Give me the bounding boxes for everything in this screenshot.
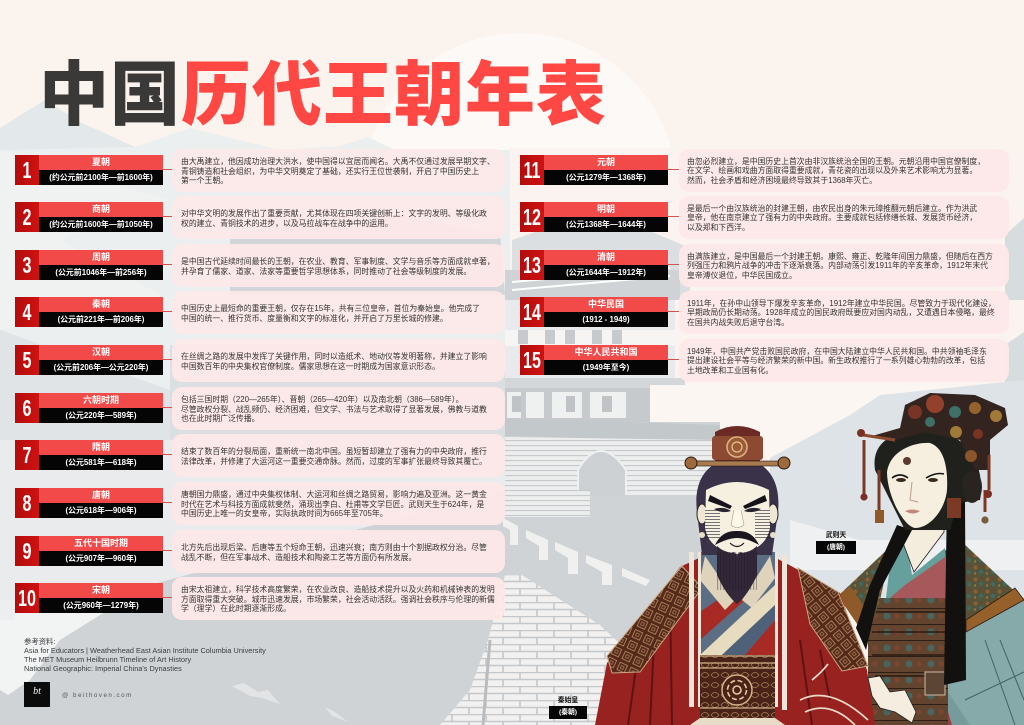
panel: Republic of China [520, 291, 1009, 334]
panel: dynasty 2 Shang: 对中华文明的发展作出了重要贡献，尤其体现在四项关键创新上：文字的发明、等级化政 [181, 209, 487, 218]
references text block [24, 637, 266, 673]
pagoda building behind cards [170, 210, 505, 440]
chest with crossed collar [700, 552, 775, 657]
panel: dynasty 4 Qin: 中国历史上最短命的重要王朝，仅存在15年，共有三位皇帝，首位为秦始皇。他完成了 [181, 304, 480, 313]
panel: dynasty 6 Six Dynasties [15, 387, 505, 430]
shoulder brocades [607, 566, 702, 673]
panel: dynasty 1 Xia [15, 149, 505, 192]
figure: clasped hands [868, 676, 916, 723]
caption: Qin Shi Huang: 秦始皇 [558, 697, 578, 704]
panel: dynasty 6 Six Dynasties: 六朝时期 [83, 395, 119, 405]
panel: dynasty 11 Yuan: (公元1279年—1368年) [566, 173, 646, 182]
panel: dynasty 5 Han [15, 339, 505, 382]
moustache and beard [715, 531, 759, 545]
panel: dynasty 1 Xia: 第一个王朝。 [181, 176, 228, 185]
panel: dynasty 12 Ming: 明朝 [597, 204, 615, 214]
panel: dynasty 11 Yuan [520, 149, 1009, 192]
website link: @ beithoven.com [62, 692, 133, 699]
panel: People's Republic of China [520, 339, 1009, 382]
caption: Wu Zetian: (唐朝) [827, 544, 845, 551]
panel: dynasty 9 Five Dynasties: 战乱不断，但在军事战术、造船技术和陶瓷工艺等方面仍有所发展。 [181, 552, 416, 562]
panel: dynasty 5 Han: 5 [23, 347, 31, 373]
figure: Wu Zetian [838, 393, 1024, 725]
panel: dynasty 8 Tang: (公元618年—906年) [65, 506, 137, 515]
ears [697, 504, 707, 524]
mountains left [0, 100, 512, 600]
panel: dynasty 7 Sui: (公元581年—618年) [65, 458, 137, 467]
long hair strands [856, 525, 912, 650]
vertical white stripes [689, 552, 787, 710]
building above wall [505, 378, 685, 422]
face [887, 443, 947, 528]
caption: Qin Shi Huang: (秦朝) [559, 709, 577, 716]
panel: dynasty 4 Qin: (公元前221年—前206年) [58, 315, 144, 324]
panel: dynasty 7 Sui: 7 [23, 442, 31, 468]
panel: Republic of China: 在国共内战失败后退守台湾。 [687, 318, 789, 327]
sleeve folds [800, 664, 868, 725]
panel: dynasty 8 Tang: 中国历史上唯一的女皇帝，实际执政时间为665年至705年。 [181, 509, 388, 518]
panel: dynasty 3 Zhou: 3 [23, 252, 31, 278]
panel: dynasty 13 Qing: 清朝 [597, 252, 615, 262]
panel: dynasty 6 Six Dynasties: 尽管政权分裂、战乱频仍、经济困难，但文学、书法与艺术取得了显著发展，佛教与道教 [181, 405, 487, 414]
panel: dynasty 11 Yuan: 由忽必烈建立，是中国历史上首次由非汉族统治全国的王朝。元朝沿用中国官僚制度， [687, 157, 985, 166]
panel: Republic of China: 1911年，在孙中山领导下爆发辛亥革命，1912年建立中华民国。尽管致力于现代化建设， [687, 299, 996, 308]
panel: dynasty 11 Yuan: 11 [523, 157, 541, 183]
caption: Qin Shi Huang [549, 696, 587, 719]
belt panel [700, 655, 775, 722]
icon: logo: bt [33, 686, 41, 697]
panel: People's Republic of China: 1949年，中国共产党击败国民政府，在中国大陆建立中华人民共和国。中共领袖毛泽东 [687, 347, 987, 356]
panel: Republic of China: (1912 - 1949) [582, 315, 630, 324]
hair [875, 431, 981, 530]
title: 中国历代王朝年表 [39, 39, 607, 140]
panel: dynasty 12 Ming: 以及郑和下西洋。 [687, 223, 750, 232]
references text block: The MET Museum Heilbrunn Timeline of Art History [24, 655, 191, 664]
panel: Republic of China: 中华民国 [588, 299, 624, 309]
panel: dynasty 4 Qin: 秦朝 [92, 299, 110, 309]
panel: dynasty 12 Ming [520, 196, 1009, 239]
panel: dynasty 13 Qing: 由满族建立，是中国最后一个封建王朝。康熙、雍正、乾隆年间国力鼎盛，但随后在西方 [687, 252, 993, 261]
hair [696, 458, 778, 555]
panel: dynasty 12 Ming: 是最后一个由汉族统治的封建王朝，由农民出身的朱元璋推翻元朝后建立。作为洪武 [687, 204, 977, 213]
panel: dynasty 7 Sui: 隋朝 [92, 442, 110, 452]
sun disc [363, 33, 677, 347]
panel: dynasty 1 Xia: 由大禹建立，他因成功治理大洪水，使中国得以宜居而闻名。大禹不仅通过发展早期文字、 [181, 157, 495, 166]
caption: Wu Zetian [816, 531, 856, 554]
panel: dynasty 13 Qing: 13 [523, 252, 541, 278]
tassels [863, 435, 895, 440]
panel: dynasty 9 Five Dynasties: 五代十国时期 [74, 538, 128, 548]
panel: dynasty 8 Tang: 8 [23, 490, 31, 516]
face [705, 482, 770, 554]
right upper backdrop [505, 148, 1024, 400]
panel: dynasty 6 Six Dynasties: (公元220年—589年) [65, 411, 137, 420]
panel: dynasty 8 Tang [15, 482, 505, 525]
panel: People's Republic of China: 中华人民共和国 [574, 347, 638, 357]
panel: dynasty 5 Han: (公元前206年—公元220年) [54, 363, 148, 372]
panel: dynasty 1 Xia: 1 [23, 157, 31, 183]
icon: logo [24, 682, 50, 707]
panel: dynasty 3 Zhou: 周朝 [92, 252, 110, 262]
panel: dynasty 7 Sui: 结束了数百年的分裂局面，重新统一南北中国。虽短暂却建立了强有力的中央政府，推行 [181, 447, 487, 456]
panel: dynasty 7 Sui: 法律改革，并修建了大运河这一重要交通命脉。然而，过度的军事扩张最终导致其覆亡。 [181, 456, 487, 466]
great wall [0, 418, 720, 725]
crown [872, 393, 1008, 470]
panel: dynasty 6 Six Dynasties: 包括三国时期（220—265年）、晋朝（265—420年）以及南北朝（386—589年）。 [181, 395, 463, 404]
panel: dynasty 1 Xia: (约公元前2100年—前1600年) [49, 173, 153, 182]
panel: dynasty 2 Shang: 商朝 [92, 204, 110, 214]
bodice [868, 598, 948, 725]
panel: dynasty 3 Zhou [15, 244, 505, 287]
panel: dynasty 7 Sui [15, 434, 505, 477]
panel: dynasty 4 Qin: 4 [23, 299, 31, 325]
panel: dynasty 10 Song: 宋朝 [92, 585, 110, 595]
panel: dynasty 2 Shang: 2 [23, 204, 31, 230]
panel: dynasty 9 Five Dynasties: (公元907年—960年) [65, 554, 137, 563]
panel: dynasty 9 Five Dynasties [15, 530, 505, 573]
panel: dynasty 10 Song: 方面取得重大突破。城市迅速发展，市场繁荣，社会活动活跃。强调社会秩序与伦理的新儒 [181, 595, 495, 604]
panel: dynasty 1 Xia: 夏朝 [92, 157, 110, 167]
panel: dynasty 8 Tang: 唐朝 [92, 490, 110, 500]
references text block: National Geographic: Imperial China's Dynasties [24, 664, 182, 673]
panel: dynasty 3 Zhou: 是中国古代延续时间最长的王朝，在农业、教育、军事制度、文学与音乐等方面成就卓著， [181, 257, 495, 266]
panel: dynasty 3 Zhou: (公元前1046年—前256年) [55, 268, 147, 277]
panel: dynasty 10 Song: 学（理学）在此时期逐渐形成。 [181, 604, 291, 613]
panel: dynasty 2 Shang: (约公元前1600年—前1050年) [49, 220, 153, 229]
panel: dynasty 10 Song: 由宋太祖建立，科学技术高度繁荣，在农业改良、造船技术提升以及火药和机械钟表的发明 [181, 585, 495, 594]
panel: dynasty 8 Tang: 唐朝国力鼎盛，通过中央集权体制、大运河和丝绸之路贸易，影响力遍及亚洲。这一黄金 [181, 490, 487, 499]
right backdrop behind figures [650, 380, 1024, 600]
panel: dynasty 2 Shang [15, 196, 505, 239]
panel: People's Republic of China: (1949年至今) [583, 363, 629, 372]
panel: dynasty 11 Yuan: 在文学、绘画和戏曲方面取得重要成就，青花瓷的出现以及外来艺术影响尤为显著。 [687, 166, 977, 175]
panel: Republic of China: 14 [523, 299, 541, 325]
panel: dynasty 5 Han: 在丝绸之路的发展中发挥了关键作用，同时以造纸术、地动仪等发明著称，并建立了影响 [181, 352, 487, 361]
panel: dynasty 5 Han: 中国数百年的中央集权官僚制度。儒家思想在这一时期成为国家意识形态。 [181, 362, 440, 370]
panel: People's Republic of China: 土地改革和工业国有化。 [687, 366, 773, 375]
panel: dynasty 10 Song: 10 [18, 585, 36, 611]
panel: dynasty 9 Five Dynasties: 9 [23, 538, 31, 564]
panel: dynasty 2 Shang: 权的建立、青铜技术的进步，以及马拉战车在战争中的运用。 [181, 218, 393, 228]
panel: dynasty 6 Six Dynasties: 6 [23, 395, 31, 421]
panel: dynasty 8 Tang: 时代在艺术与科技方面成就斐然，涌现出李白、杜甫等文学巨匠。武则天生于624年，是 [181, 500, 484, 509]
collar [886, 532, 948, 598]
panel: dynasty 13 Qing: (公元1644年—1912年) [566, 268, 646, 277]
panel: dynasty 9 Five Dynasties: 北方先后出现后梁、后唐等五个短命王朝，迅速兴衰；南方则由十个割据政权分治。尽管 [181, 543, 487, 552]
hat [715, 426, 760, 462]
panel: dynasty 5 Han: 汉朝 [92, 347, 110, 357]
references text block: 参考资料: [24, 637, 55, 646]
panel: dynasty 13 Qing [520, 244, 1009, 287]
shawl [838, 545, 892, 630]
panel: dynasty 12 Ming: 12 [523, 204, 541, 230]
panel: dynasty 6 Six Dynasties: 也在此时期广泛传播。 [181, 414, 259, 423]
panel: Republic of China: 早期政局仍长期动荡。1928年成立的国民政府既要应对国内动乱，又遭遇日本侵略，最终 [687, 308, 995, 317]
caption: Wu Zetian: 武则天 [826, 532, 846, 539]
panel: dynasty 10 Song: (公元960年—1279年) [63, 601, 139, 610]
back hair and sleeve [905, 598, 1024, 725]
panel: dynasty 12 Ming: 皇帝，他在南京建立了强有力的中央政府。主要成就包括修缮长城、发展货币经济， [687, 213, 977, 222]
panel: dynasty 4 Qin: 中国的统一、推行货币、度量衡和文字的标准化，并开启了万里长城的修建。 [181, 314, 448, 322]
panel: dynasty 11 Yuan: 元朝 [597, 157, 615, 167]
lower left pale streaks [0, 612, 348, 722]
panel: People's Republic of China: 提出建设社会平等与经济繁荣的新中国。新生政权推行了一系列雄心勃勃的改革，包括 [687, 356, 985, 365]
panel: People's Republic of China: 15 [523, 347, 541, 373]
panel: dynasty 4 Qin [15, 291, 505, 334]
panel: dynasty 1 Xia: 青铜铸造和社会组织，为中华文明奠定了基础，还实行王位世袭制，开启了中国历史上 [181, 167, 479, 176]
panel: dynasty 12 Ming: (公元1368年—1644年) [566, 220, 646, 229]
panel: dynasty 13 Qing: 列强压力和鸦片战争的冲击下逐渐衰落。内部动荡引发1911年的辛亥革命，1912年末代 [687, 261, 988, 270]
panel: dynasty 13 Qing: 皇帝溥仪退位，中华民国成立。 [687, 271, 797, 280]
figure: Qin Shi Huang [595, 426, 875, 725]
panel: dynasty 11 Yuan: 然而，社会矛盾和经济困境最终导致其于1368年灭亡。 [687, 176, 877, 185]
panel: dynasty 3 Zhou: 并孕育了儒家、道家、法家等重要哲学思想体系，同时推动了社会等级制度的发展。 [181, 266, 471, 276]
references text block: Asia for Educators | Weatherhead East Asian Institute Columbia University [24, 646, 266, 655]
panel: dynasty 10 Song [15, 577, 505, 620]
